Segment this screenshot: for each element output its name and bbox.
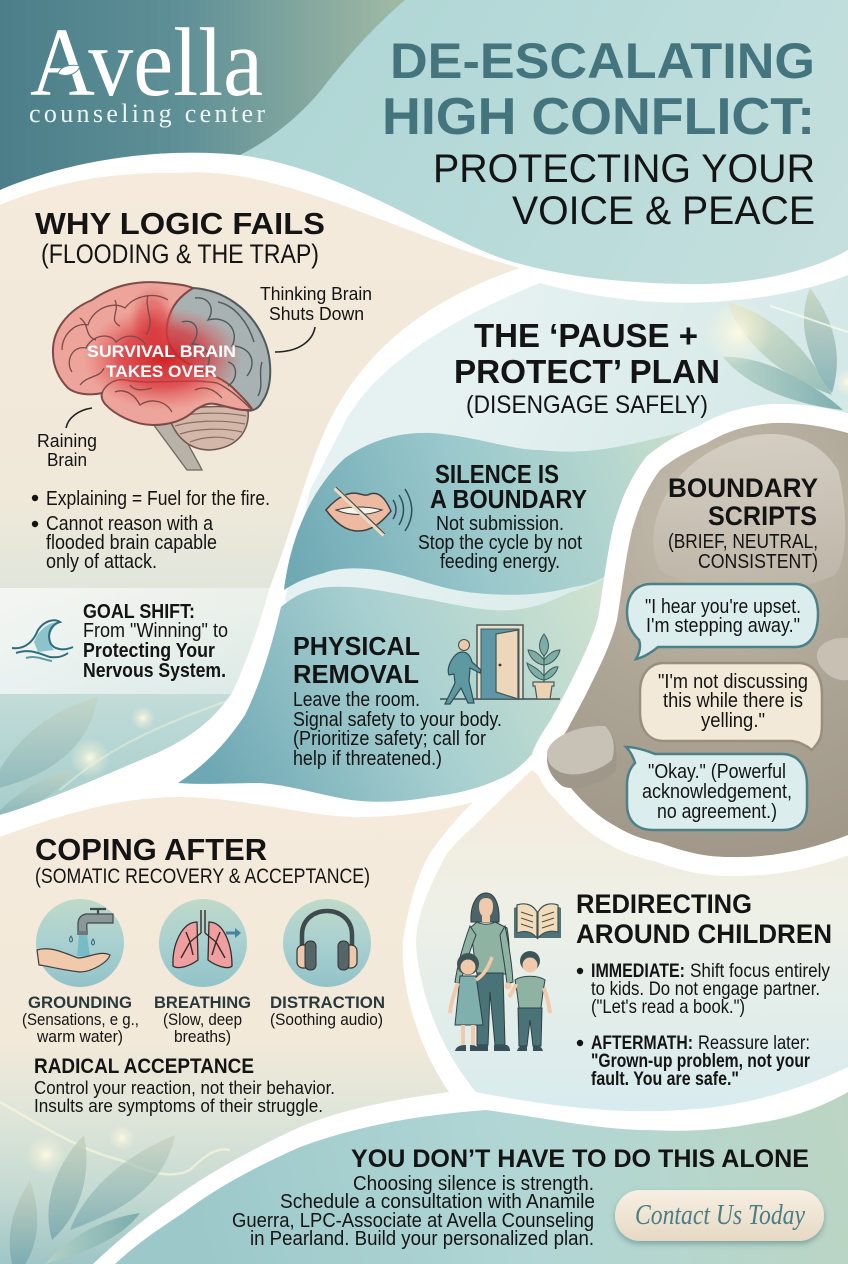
footer body text: Choosing silence is strength. [353,1173,594,1195]
redirecting heading: AROUND CHILDREN [576,919,832,949]
goal shift text: GOAL SHIFT: [83,601,195,623]
icon: lungs [159,899,247,987]
bullet: immediate: IMMEDIATE: [591,961,685,982]
scripts heading [668,473,818,573]
heading: why logic fails [35,206,325,269]
scripts heading: (BRIEF, NEUTRAL, [668,531,818,553]
brain labels: Raining [37,431,97,451]
bullet: immediate: to kids. Do not engage partner. [591,979,820,1000]
speech bubble 3: acknowledgement, [642,781,792,803]
radical acceptance text: Insults are symptoms of their struggle. [34,1096,323,1116]
scripts heading: CONSISTENT) [698,551,818,573]
physical removal text: help if threatened.) [293,748,442,770]
icon: crossed out lips [326,487,412,535]
panel: coping after [0,797,473,1264]
panel: why logic fails [0,172,520,815]
label: breathing: breaths) [174,1027,231,1046]
speech bubble 3: no agreement.) [657,801,777,823]
brain labels: Thinking Brain [260,284,372,304]
decorative leaves [0,588,270,814]
label: distraction: DISTRACTION [270,993,385,1012]
footer body text: in Pearland. Build your personalized plan. [250,1228,594,1250]
speech bubble 2: "I'm not discussing [658,671,808,693]
panel: redirecting around children [416,770,848,1111]
icon: wave [12,620,73,661]
heading: why logic fails: WHY LOGIC FAILS [35,206,325,241]
icon: person leaving through door with plant [440,625,560,704]
speech bubble 3: "Okay." (Powerful [648,761,786,783]
panel: boundary scripts rock [547,423,848,857]
goal shift band [0,588,270,694]
silence text: feeding energy. [440,551,560,573]
redirecting heading [576,889,832,949]
physical removal text: Leave the room. [293,689,420,711]
icon: water on hand [36,899,124,987]
title [382,33,815,233]
bullet: immediate [577,961,830,1018]
physical removal text: PHYSICAL [293,631,420,661]
speech bubble 1: "I hear you're upset. [645,596,801,618]
bullet list: Cannot reason with a [46,513,214,535]
bullet: aftermath: Reassure later: [698,1033,810,1054]
scripts heading: BOUNDARY [668,473,818,503]
label: distraction: (Soothing audio) [270,1010,383,1029]
bullet: immediate: Shift focus entirely [690,961,830,982]
logo background [0,0,405,190]
footer body text: Schedule a consultation with Anamile [280,1191,595,1213]
panel: physical removal [178,565,625,802]
footer body text [232,1173,595,1250]
heading: coping after: COPING AFTER [35,832,267,867]
redirecting heading: REDIRECTING [576,889,752,919]
footer body text: Guerra, LPC-Associate at Avella Counseling [232,1210,594,1232]
silence text [418,459,587,573]
brain illustration [53,282,270,470]
icon: headphones [283,899,371,987]
logo: Avella [30,9,263,116]
brain labels [37,284,372,470]
decorative leaves and glow [0,1102,230,1264]
silence text: Not submission. [436,513,564,535]
bullet list: only of attack. [46,551,157,573]
logo: counseling center [29,99,265,128]
button: contact us today: Contact Us Today [635,1200,805,1231]
label: grounding: GROUNDING [28,993,132,1012]
footer heading: YOU DON’T HAVE TO DO THIS ALONE [351,1145,809,1173]
label: breathing: (Slow, deep [163,1010,242,1029]
physical removal text [293,631,502,770]
scripts heading: SCRIPTS [708,501,817,531]
goal shift text [83,601,228,682]
bullet: aftermath [577,1033,810,1090]
brain labels: SURVIVAL BRAIN [87,342,236,361]
decorative leaves top right [703,288,848,410]
title: DE-ESCALATING [390,33,815,89]
heading: coping after: (SOMATIC RECOVERY & ACCEPTANCE) [35,865,370,888]
speech bubble 2 [640,663,822,750]
bullet: immediate: ("Let's read a book.") [591,997,745,1018]
title: HIGH CONFLICT: [382,88,815,146]
bullet: aftermath: AFTERMATH: [591,1033,693,1054]
brain labels: Brain [47,450,87,470]
silence text: Stop the cycle by not [418,532,582,554]
speech bubble 2: this while there is [663,690,803,712]
radical acceptance text [34,1055,335,1116]
goal shift text: From "Winning" to [83,620,228,642]
label: distraction [270,993,385,1029]
silence text: A BOUNDARY [430,484,587,514]
bullet list: Explaining = Fuel for the fire. [46,488,270,510]
heading: pause + protect: (DISENGAGE SAFELY) [466,391,708,419]
speech bubble 3 [626,747,807,830]
brain labels: Shuts Down [269,304,364,324]
button: contact us today [615,1190,824,1241]
physical removal text: REMOVAL [293,659,419,689]
physical removal text: (Prioritize safety; call for [293,728,486,750]
icon: open book [514,904,561,938]
bullet: aftermath: fault. You are safe." [591,1069,739,1090]
heading: pause + protect: THE ‘PAUSE + [474,317,698,354]
panel: footer call to action [115,1092,848,1264]
heading: coping after [35,832,370,888]
lighter rock slab [653,434,845,593]
radical acceptance text: RADICAL ACCEPTANCE [34,1055,254,1078]
label: breathing [154,993,251,1046]
bullet list: flooded brain capable [46,532,217,554]
panel: pause + protect [178,275,848,802]
goal shift text: Nervous System. [83,660,226,682]
title: PROTECTING YOUR [433,147,815,191]
heading: why logic fails: (FLOODING & THE TRAP) [41,239,319,269]
icon: parent and children [450,893,550,1051]
speech bubble 1: I'm stepping away." [646,615,800,637]
panel: silence is a boundary [284,430,690,595]
physical removal text: Signal safety to your body. [293,709,502,731]
heading: pause + protect [454,317,720,419]
silence text: SILENCE IS [435,459,559,489]
goal shift text: Protecting Your [83,640,215,662]
radical acceptance text: Control your reaction, not their behavior. [34,1078,335,1098]
label: grounding [22,993,139,1046]
label: grounding: warm water) [36,1027,123,1046]
speech bubble 1 [627,584,818,659]
label: breathing: BREATHING [154,993,251,1012]
heading: pause + protect: PROTECT’ PLAN [454,353,720,390]
pebbles [547,638,848,788]
brain labels: TAKES OVER [106,362,217,381]
speech bubble 2: yelling." [701,710,765,732]
label: grounding: (Sensations, e g., [22,1010,139,1029]
title: VOICE & PEACE [512,189,815,233]
bullet list [32,488,270,573]
panel: header [0,0,848,284]
